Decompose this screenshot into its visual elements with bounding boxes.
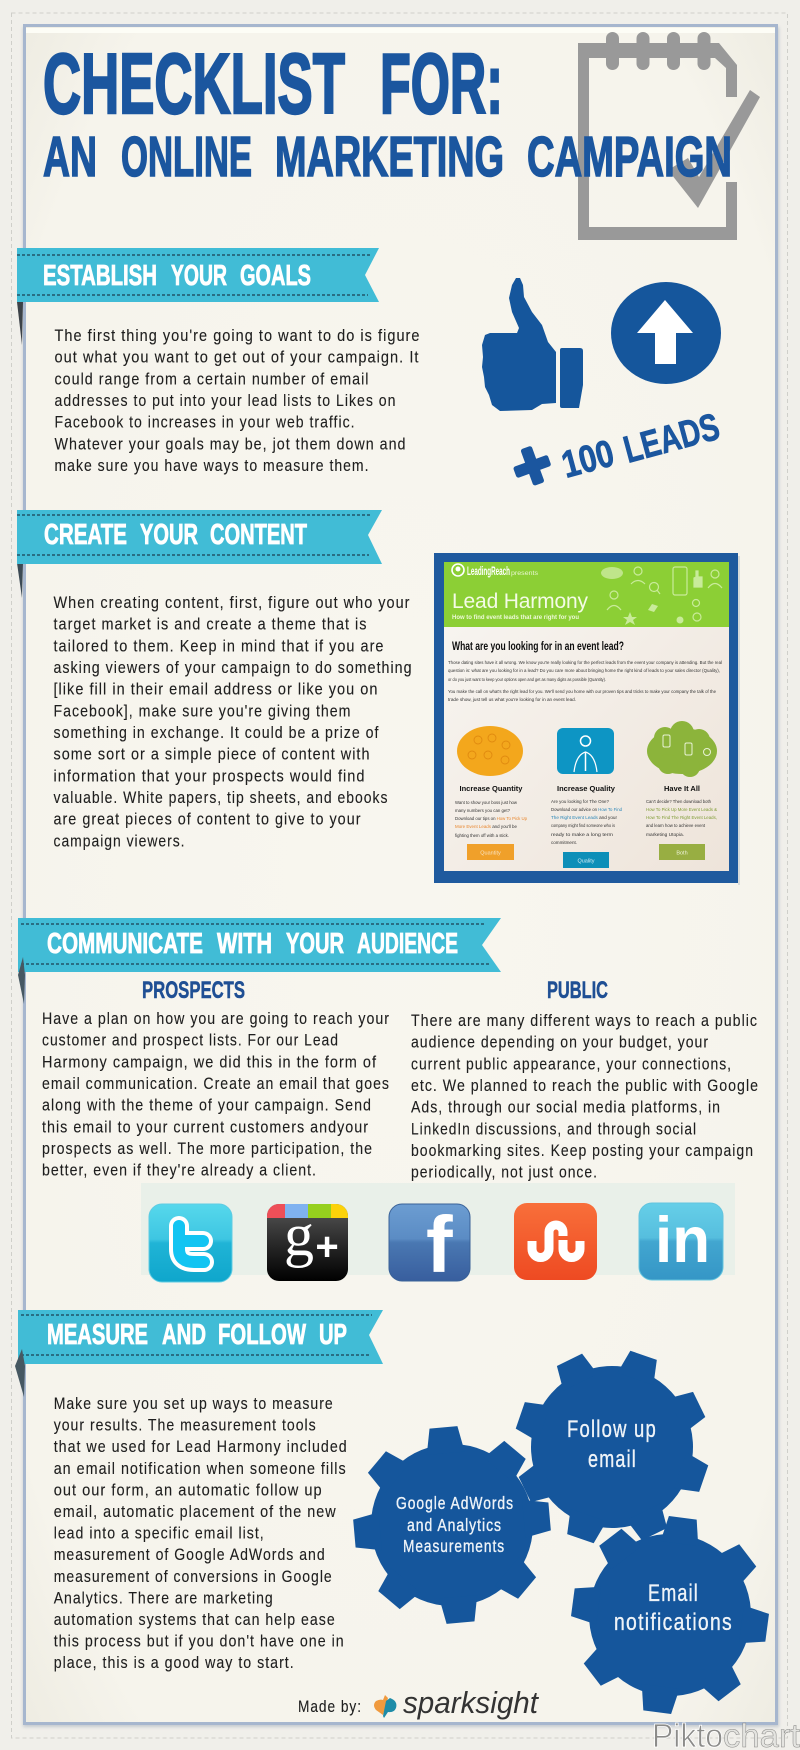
text block: establish your goals <box>54 326 420 475</box>
text block: create your content: [like fill in their email address or like you on <box>54 680 378 699</box>
text block: create your content: something in exchange. It could be a prize of <box>54 723 380 742</box>
option: increase quality: company might find someone who is <box>551 823 616 828</box>
section banner: create your content: CREATE <box>44 519 127 551</box>
screenshot intro copy: question is: what are you looking for in a lead? Do you care more about bringing home the right kind of leads to your sales director (Quality), <box>448 668 720 673</box>
option: have it all: and learn how to achieve event <box>646 823 706 828</box>
option: have it all: marketing Utopia. <box>646 832 684 837</box>
gear: google adwords and analytics measurements: Google AdWords <box>396 1493 514 1513</box>
text block: public: periodically, not just once. <box>411 1163 598 1182</box>
text block: measure and follow up: measurement of conversions in Google <box>54 1567 333 1586</box>
icon: google plus: g <box>284 1202 314 1268</box>
gear: google adwords and analytics measurements <box>346 1419 558 1631</box>
text block: public <box>411 1011 759 1182</box>
piktochart watermark <box>652 1717 800 1750</box>
text block: establish your goals: Facebook to increases in your web traffic. <box>54 413 356 432</box>
option: increase quality: commitment. <box>551 840 577 845</box>
gear: google adwords and analytics measurements: and Analytics <box>407 1515 502 1535</box>
gear: google adwords and analytics measurements: Measurements <box>403 1536 505 1556</box>
text block: prospects: customer and prospect lists. For our Lead <box>42 1031 339 1050</box>
text block: measure and follow up <box>54 1394 348 1672</box>
text block: establish your goals: addresses to put into your lead lists to Likes on <box>54 391 396 410</box>
icon: facebook <box>389 1200 470 1289</box>
option: increase quality: Download our advice on How To Find <box>551 807 623 812</box>
option: increase quality: ready to make a long term <box>551 832 613 837</box>
section banner: measure and follow up: UP <box>319 1319 347 1351</box>
text block: measure and follow up: place, this is a good way to start. <box>54 1653 295 1672</box>
section banner: establish your goals: ESTABLISH <box>43 260 157 292</box>
text block: prospects: Have a plan on how you are going to reach your <box>42 1009 390 1028</box>
text block: create your content: are great pieces of content to give to your <box>54 810 362 829</box>
option: increase quantity: More Event Leads and you'll be <box>455 824 518 829</box>
panel: lead harmony screenshot <box>434 553 740 885</box>
screenshot intro copy: Those dating sites have it all wrong. We know you're really looking for the perfect leads from the event your company is attending. But the real <box>448 660 722 665</box>
text block: prospects: Harmony campaign, we did this in the form of <box>42 1052 377 1071</box>
option: increase quantity <box>455 726 528 860</box>
title: MARKETING <box>275 125 504 189</box>
text block: measure and follow up: this process but if you don't have one in <box>54 1632 345 1651</box>
heading: prospects: PROSPECTS <box>142 977 245 1004</box>
option: increase quantity: Quantity <box>480 850 501 856</box>
icon: linkedin <box>639 1203 723 1280</box>
icon: facebook: f <box>426 1200 453 1289</box>
icon: checklist notepad <box>578 32 760 240</box>
icon: thumbs up <box>482 278 583 411</box>
text block: create your content: Facebook], make sure you're giving them <box>54 701 352 720</box>
text block: create your content: tailored to them. Keep in mind that if you are <box>54 636 384 655</box>
icon: google plus <box>267 1202 348 1281</box>
text block: create your content: asking viewers of your campaign to do something <box>54 658 412 677</box>
title: ONLINE <box>121 125 252 189</box>
text block: prospects: prospects as well. The more participation, the <box>42 1139 373 1158</box>
text block: prospects <box>42 1009 390 1180</box>
text block: establish your goals: make sure you have ways to measure them. <box>54 456 370 475</box>
option: have it all: Both <box>676 850 688 856</box>
title: CHECKLIST <box>43 37 345 132</box>
text block: measure and follow up: measurement of Google AdWords and <box>54 1545 326 1564</box>
screenshot intro copy: You make the call on what's the right lead for you. We'll send you home with our proven tips and tricks to make your company the talk of the <box>448 689 717 694</box>
screenshot header: LeadingReach <box>467 564 510 578</box>
made by credit: Made by: <box>298 1697 362 1716</box>
text block: measure and follow up: out our form, an automatic follow up <box>54 1480 323 1499</box>
screenshot header <box>444 562 729 627</box>
option: increase quality: Are you looking for The One? <box>551 799 610 804</box>
screenshot intro copy: trade show, just tell us what you're looking for in an event lead. <box>448 697 576 702</box>
icon: twitter <box>149 1204 232 1282</box>
text block: measure and follow up: an email notification when someone fills <box>54 1459 347 1478</box>
text block: establish your goals: Whatever your goals may be, jot them down and <box>54 434 406 453</box>
text block: measure and follow up: your results. The measurement tools <box>54 1416 317 1435</box>
callout: plus 100 leads: LEADS <box>619 406 724 472</box>
section banner: create your content: CONTENT <box>210 519 307 551</box>
text block: public: LinkedIn discussions, and through social <box>411 1119 697 1138</box>
text block: establish your goals: The first thing you're going to want to do is figure <box>54 326 420 345</box>
text block: prospects: better, even if they're already a client. <box>42 1161 317 1180</box>
section banner: measure and follow up: MEASURE <box>47 1319 148 1351</box>
gear: follow up email: email <box>588 1446 637 1473</box>
section banner: create your content <box>17 510 382 598</box>
text block: measure and follow up: lead into a specific email list, <box>54 1524 265 1543</box>
section banner: establish your goals <box>17 248 379 345</box>
text block: measure and follow up: email, automatic placement of the new <box>54 1502 337 1521</box>
screenshot intro copy: or do you just want to keep your options open and get as many digits as possible (Quantity). <box>448 677 606 682</box>
icon: google plus: + <box>315 1225 339 1269</box>
text block: prospects: email communication. Create an email that goes <box>42 1074 390 1093</box>
title: AN <box>43 125 97 189</box>
gear: email notifications: Email <box>648 1580 699 1607</box>
option: have it all: Can't decide? Then download both <box>646 799 712 804</box>
option: have it all: Have It All <box>664 784 700 793</box>
option: increase quality: The Right Event Leads and your <box>551 815 618 820</box>
text block: measure and follow up: Make sure you set up ways to measure <box>54 1394 334 1413</box>
logo: sparksight: sparksight <box>403 1685 539 1720</box>
option: increase quality: Increase Quality <box>557 784 616 793</box>
text block: establish your goals: could range from a certain number of email <box>54 369 370 388</box>
text block: create your content: When creating content, first, figure out who your <box>54 593 410 612</box>
option: increase quantity: fighting them off with a stick. <box>455 833 509 838</box>
text block: prospects: this email to your current customers andyour <box>42 1117 369 1136</box>
section banner: communicate with your audience: COMMUNICATE <box>47 928 203 960</box>
heading: public: PUBLIC <box>547 977 608 1004</box>
text block: public: current public appearance, your connections, <box>411 1054 732 1073</box>
title <box>43 37 732 189</box>
text block: create your content: campaign viewers. <box>54 831 186 850</box>
gear: follow up email <box>489 1324 735 1570</box>
text block: create your content: information that your prospects would find <box>54 766 366 785</box>
option: have it all <box>646 721 717 860</box>
callout: plus 100 leads <box>509 406 724 490</box>
text block: public: audience depending on your budget, your <box>411 1033 709 1052</box>
text block: establish your goals: out what you want to get out of your campaign. It <box>54 348 420 367</box>
screenshot intro copy <box>448 660 722 702</box>
text block: create your content: valuable. White papers, tip sheets, and ebooks <box>54 788 388 807</box>
option: have it all: How To Pick Up More Event Leads & <box>646 807 717 812</box>
gear: email notifications <box>560 1505 780 1725</box>
text block: create your content: some sort or a simple piece of content with <box>54 745 370 764</box>
screenshot header: How to find event leads that are right for you <box>452 614 579 621</box>
section banner: communicate with your audience: WITH <box>217 928 272 960</box>
text block: measure and follow up: Analytics. There are marketing <box>54 1588 274 1607</box>
section banner: communicate with your audience <box>18 918 501 1004</box>
option: have it all: How To Find The Right Event Leads, <box>646 815 717 820</box>
option: increase quantity: Download our tips on How To Pick Up <box>455 816 528 821</box>
text block: prospects: along with the theme of your campaign. Send <box>42 1096 372 1115</box>
screenshot heading: What are you looking for in an event lead? <box>452 641 624 653</box>
section banner: communicate with your audience: YOUR <box>286 928 344 960</box>
icon: linkedin: in <box>655 1203 710 1276</box>
text block: public: Ads, through our social media platforms, in <box>411 1098 721 1117</box>
section banner: measure and follow up: FOLLOW <box>218 1319 306 1351</box>
gear: follow up email: Follow up <box>567 1416 657 1443</box>
option: increase quantity: many numbers you can get? <box>455 808 511 813</box>
section banner: measure and follow up <box>15 1310 383 1397</box>
callout: plus 100 leads: 100 <box>557 433 619 487</box>
option: increase quality <box>551 728 623 868</box>
text block: measure and follow up: automation systems that can help ease <box>54 1610 336 1629</box>
option: increase quality: Quality <box>577 858 595 864</box>
text block: create your content <box>54 593 412 850</box>
icon: up arrow in circle <box>611 282 721 384</box>
screenshot header: Lead Harmony <box>452 590 588 613</box>
section banner: create your content: YOUR <box>140 519 198 551</box>
text block: measure and follow up: that we used for Lead Harmony included <box>54 1437 348 1456</box>
section banner: communicate with your audience: AUDIENCE <box>357 928 458 960</box>
section banner: establish your goals: YOUR <box>171 260 227 292</box>
text block: create your content: target market is and create a theme that is <box>54 615 368 634</box>
section banner: establish your goals: GOALS <box>240 260 311 292</box>
panel: social icons backing <box>141 1183 735 1275</box>
title: FOR: <box>380 37 503 132</box>
gear: email notifications: notifications <box>614 1609 733 1636</box>
option: increase quantity: Want to show your boss just how <box>455 800 518 805</box>
section banner: measure and follow up: AND <box>162 1319 206 1351</box>
screenshot header: presents <box>511 570 539 577</box>
option: increase quantity: Increase Quantity <box>460 784 523 793</box>
icon: stumbleupon <box>514 1203 597 1280</box>
